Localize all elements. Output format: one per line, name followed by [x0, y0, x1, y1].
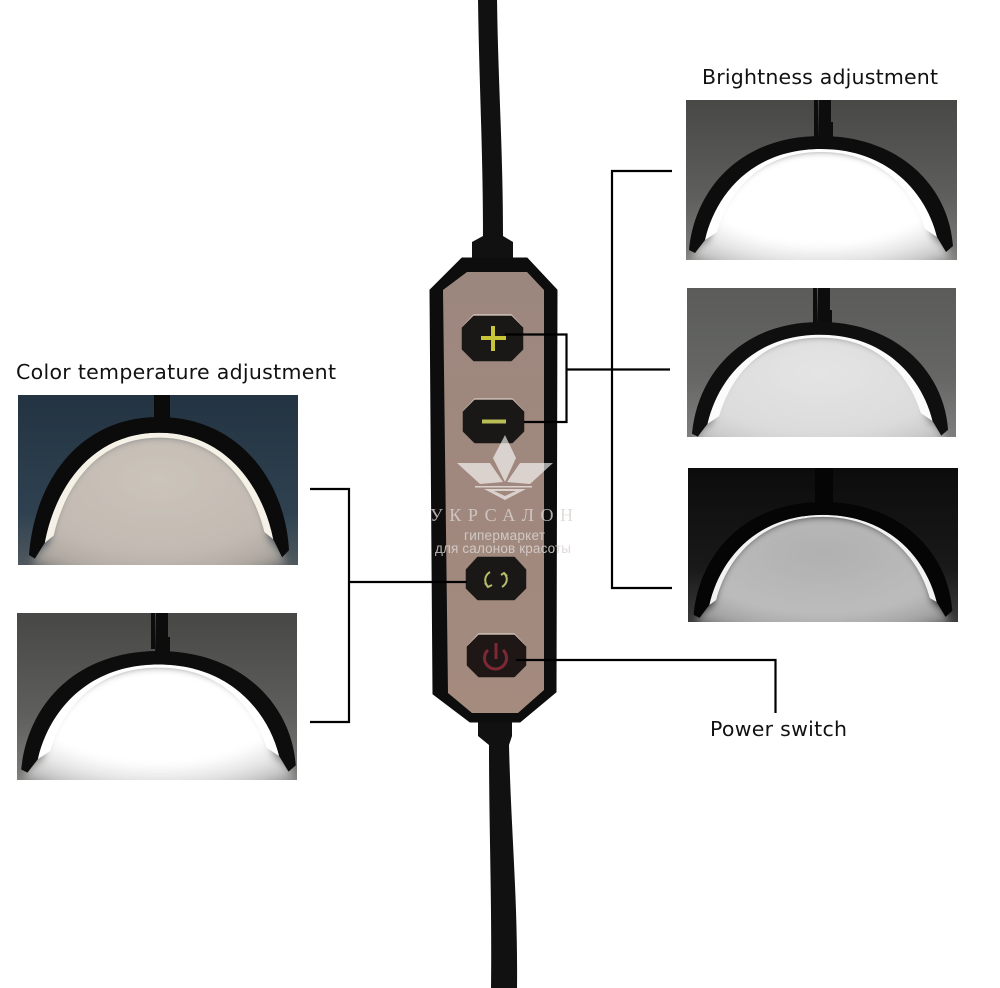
icon: power: [484, 643, 507, 669]
connector: brightness bracket: [566, 171, 672, 588]
photo: brightness medium: [687, 288, 956, 437]
lamp arc: [21, 651, 296, 773]
button: color temperature: [467, 558, 525, 599]
controller body outline: [430, 258, 557, 722]
icon: plus: [481, 326, 506, 351]
icon: minus: [482, 420, 506, 424]
background: [686, 100, 957, 260]
watermark: brand name: УКРСАЛОН: [430, 505, 573, 525]
connector: power switch: [516, 660, 776, 713]
background: [18, 395, 298, 565]
button: minus: [464, 399, 523, 442]
light glow: [693, 514, 953, 622]
watermark: logo: [457, 435, 553, 500]
lit strip: [45, 433, 273, 543]
lamp stem: [813, 288, 832, 326]
background: [688, 468, 958, 622]
light glow: [29, 432, 289, 565]
lamp arc: [692, 322, 948, 437]
photo: brightness low: [688, 468, 958, 622]
connector: color temperature bracket: [310, 489, 467, 722]
background: [687, 288, 956, 437]
button: power: [468, 634, 525, 676]
watermark: tagline line 2: для салонов красоты: [435, 541, 571, 556]
background: [17, 613, 297, 780]
lamp stem: [154, 395, 170, 418]
lit strip: [709, 515, 937, 605]
controller brown face: [443, 272, 544, 713]
light glow: [20, 664, 296, 780]
photo: brightness high: [686, 100, 957, 276]
controller remote: [430, 258, 557, 722]
button: plus: [463, 315, 522, 360]
connector: plus and minus buttons to bracket: [505, 334, 566, 422]
lamp stem: [815, 477, 833, 502]
lit strip: [707, 335, 933, 424]
lamp arc: [29, 417, 289, 559]
lamp arc: [694, 502, 952, 618]
icon: rotate arrows: [485, 572, 507, 587]
lamp stem: [814, 100, 833, 140]
cable: bottom: [478, 718, 517, 988]
light glow: [693, 334, 947, 437]
label: power switch: Power switch: [710, 717, 847, 741]
photo: cool color temperature: [17, 613, 299, 797]
watermark: tagline line 1: гипермаркет: [464, 528, 545, 543]
lamp arc: [689, 136, 953, 253]
lamp stem: [151, 613, 170, 655]
heading: brightness adjustment: Brightness adjustment: [702, 65, 938, 89]
lit strip: [38, 665, 279, 759]
photo: warm color temperature: [18, 395, 298, 565]
light glow: [688, 149, 954, 260]
lit strip: [705, 149, 937, 240]
heading: color temperature adjustment: Color temperature adjustment: [16, 360, 336, 384]
cable: top: [472, 0, 513, 262]
